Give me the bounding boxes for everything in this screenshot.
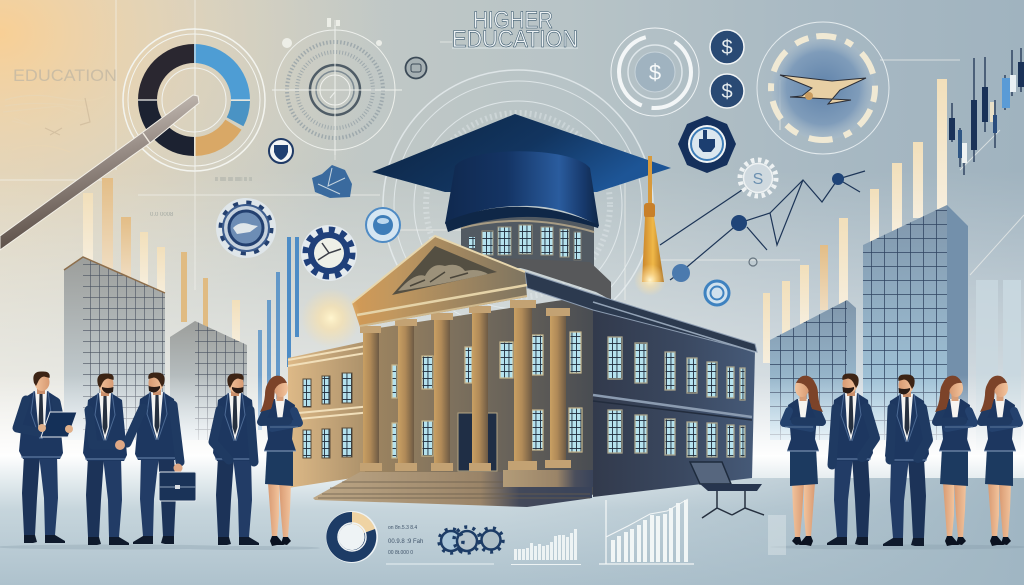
woman facing right [784,376,823,546]
icon: round diploma emblem [757,22,889,154]
background building: left tall tower [64,257,165,440]
faint blueprint lines [0,0,1024,300]
chart: bottom donut [326,511,378,563]
faint tiny caption: lll llllll lllll lllllll lll lll [215,177,252,183]
man facing left [827,373,875,545]
icon: navy hexagonal badge [678,116,736,173]
icon: gear clock [301,225,357,281]
wing roof cornice [525,272,757,352]
people: left group [17,371,299,546]
tassel [634,156,666,296]
background building: right low block [770,300,856,440]
entrance steps [313,470,593,507]
chart: left blue strips [258,237,299,430]
chart: candlesticks [949,48,1024,175]
dome drum [461,212,594,268]
legend: small captions: 00 8t.000 0 [388,550,413,556]
legend: small captions [386,525,494,564]
person with tablet [17,371,77,543]
icon: navy gear with wave [216,198,276,258]
heading: HIGHER EDUCATION: EDUCATION [452,26,578,53]
briefcase [159,472,196,501]
icon: dollar coin upper: $ [721,37,733,59]
background building: far right pale block [976,280,1021,450]
bench [690,462,764,518]
chart: large bottom rising bars [599,499,694,564]
chart: trend line with nodes [660,171,865,282]
entrance door [458,413,497,471]
graduation cap [372,114,671,232]
pediment [352,236,527,327]
faint tiny numbers: 0.0 0008 [150,212,174,218]
icon: bottom gear trio [439,527,503,553]
legend: small captions: on 8n.5.3 8.4 [388,525,417,531]
icon: concentric clock dial [272,25,402,155]
main building [288,114,757,507]
people: right group [784,373,1019,546]
woman facing left [980,376,1019,546]
cap lower lip [445,207,599,232]
woman with crossed arms [260,376,299,546]
chart: right rising bars [763,79,947,363]
faint text: EDUCATION: EDUCATION [13,66,117,85]
icon: dollar coin lower: $ [721,81,733,103]
warm light glow [301,288,361,348]
chart: small bottom bars [511,529,581,565]
person shaking hands [83,373,129,545]
heading: HIGHER EDUCATION [452,7,578,53]
background building: right tall tower [863,205,968,440]
legend: small captions: 00.9.8 :9 Fah [388,539,423,545]
cap crown [445,151,599,226]
icon: dollar ring: $ [649,60,661,85]
portico back wall [365,295,595,495]
background building: left low block [170,321,247,440]
portico windows [392,332,582,458]
left wing [288,340,372,488]
columns [360,300,571,471]
small white glints [282,18,382,48]
icon: small dark badge [406,58,426,78]
cap board [372,114,671,192]
icon: large pointer [0,95,199,250]
icon: blue spiral ring [705,281,729,305]
chart: donut with four segments [123,28,265,171]
heading: HIGHER EDUCATION: HIGHER [473,7,553,34]
icon: dollar coin lower [710,74,744,108]
floor [0,455,1024,585]
rings behind the graduation cap [383,70,653,340]
chart: left rising bars [83,178,240,345]
faint grid texture [768,515,786,555]
right wing facade [525,272,757,497]
mist over the skyline [0,375,1024,460]
icon: dollar ring [611,28,699,116]
person with briefcase [115,372,196,544]
icon: white S gear [740,160,776,196]
icon: white S gear: S [753,171,763,188]
wing windows [608,337,745,457]
man facing left [883,374,929,546]
person with hand in pocket [213,373,259,545]
drum base [480,257,611,300]
woman facing left [935,376,974,546]
floor shadows [0,544,1024,550]
faint engraving lines behind EDUCATION [3,95,105,152]
icon: dollar coin upper [710,30,744,64]
icon: blue map shape [312,165,352,198]
icon: blue orb [366,208,400,242]
icon: shield badge [269,139,293,163]
